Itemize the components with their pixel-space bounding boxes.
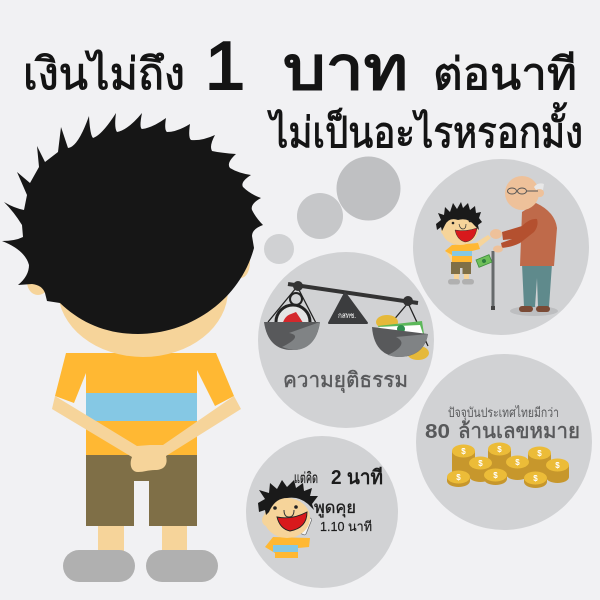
small boy body	[445, 235, 491, 284]
panel background	[416, 354, 592, 530]
scale	[264, 281, 429, 360]
boy body	[265, 537, 310, 558]
beam	[288, 284, 418, 303]
hair	[2, 113, 263, 334]
coin stacks: $	[493, 471, 498, 480]
title: บาท	[283, 35, 408, 102]
fulcrum	[329, 293, 367, 323]
thought bubbles	[264, 156, 400, 264]
panel background	[413, 159, 589, 335]
ears	[27, 246, 250, 295]
stopwatch	[276, 293, 310, 339]
coin stacks: $	[555, 461, 560, 470]
coin stacks: $	[497, 445, 502, 454]
left pan	[264, 322, 320, 350]
old man hands	[490, 229, 503, 252]
panel: justice	[258, 252, 434, 428]
main character	[2, 113, 263, 582]
talk time text: 2 นาที	[331, 466, 383, 489]
old man legs	[522, 264, 552, 307]
numbers text	[425, 405, 580, 443]
old man cane	[492, 251, 494, 307]
title: 1	[205, 28, 245, 104]
coin stacks: $	[461, 447, 466, 456]
panel background	[246, 436, 398, 588]
panel background	[258, 252, 434, 428]
numbers text: 80	[425, 421, 450, 443]
coins behind	[376, 315, 429, 360]
old man head	[505, 176, 544, 210]
title: เงินไม่ถึง	[23, 49, 185, 99]
banknote	[476, 255, 492, 267]
face	[58, 223, 228, 357]
numbers text: ปัจจุบันประเทศไทยมีกว่า	[448, 405, 559, 421]
shoes	[63, 550, 218, 582]
coin stacks: $	[537, 449, 542, 458]
panel: phone numbers	[416, 354, 592, 530]
title: ต่อนาที	[433, 50, 577, 99]
phone	[299, 516, 312, 535]
small boy head	[436, 202, 482, 245]
old man shoes	[519, 306, 550, 312]
right pan	[372, 327, 428, 357]
talk time text: แต่คิด	[294, 470, 318, 487]
talk time text	[294, 466, 383, 534]
shirt stripe	[86, 393, 197, 421]
legs	[98, 525, 187, 552]
old man arm	[501, 219, 538, 248]
boy head	[258, 480, 318, 538]
coin stacks	[447, 442, 569, 488]
shirt	[55, 353, 234, 455]
fulcrum label: กสทช.	[338, 311, 356, 320]
money	[378, 321, 424, 334]
title	[23, 28, 583, 156]
coin stacks: $	[478, 459, 483, 468]
justice label: ความยุติธรรม	[283, 369, 408, 393]
talk time text: 1.10 นาที	[320, 519, 372, 534]
scale strings	[268, 288, 428, 346]
panel: talk time	[246, 436, 398, 588]
coin stacks: $	[533, 474, 538, 483]
coin stacks: $	[456, 473, 461, 482]
old man body	[520, 203, 557, 266]
shorts	[86, 455, 197, 526]
talk time text: พูดคุย	[314, 498, 356, 518]
arms and hands	[52, 396, 241, 472]
coin stacks: $	[515, 458, 520, 467]
panel: old man and boy	[413, 159, 589, 335]
numbers text: ล้านเลขหมาย	[458, 420, 580, 443]
shadow	[510, 306, 558, 316]
